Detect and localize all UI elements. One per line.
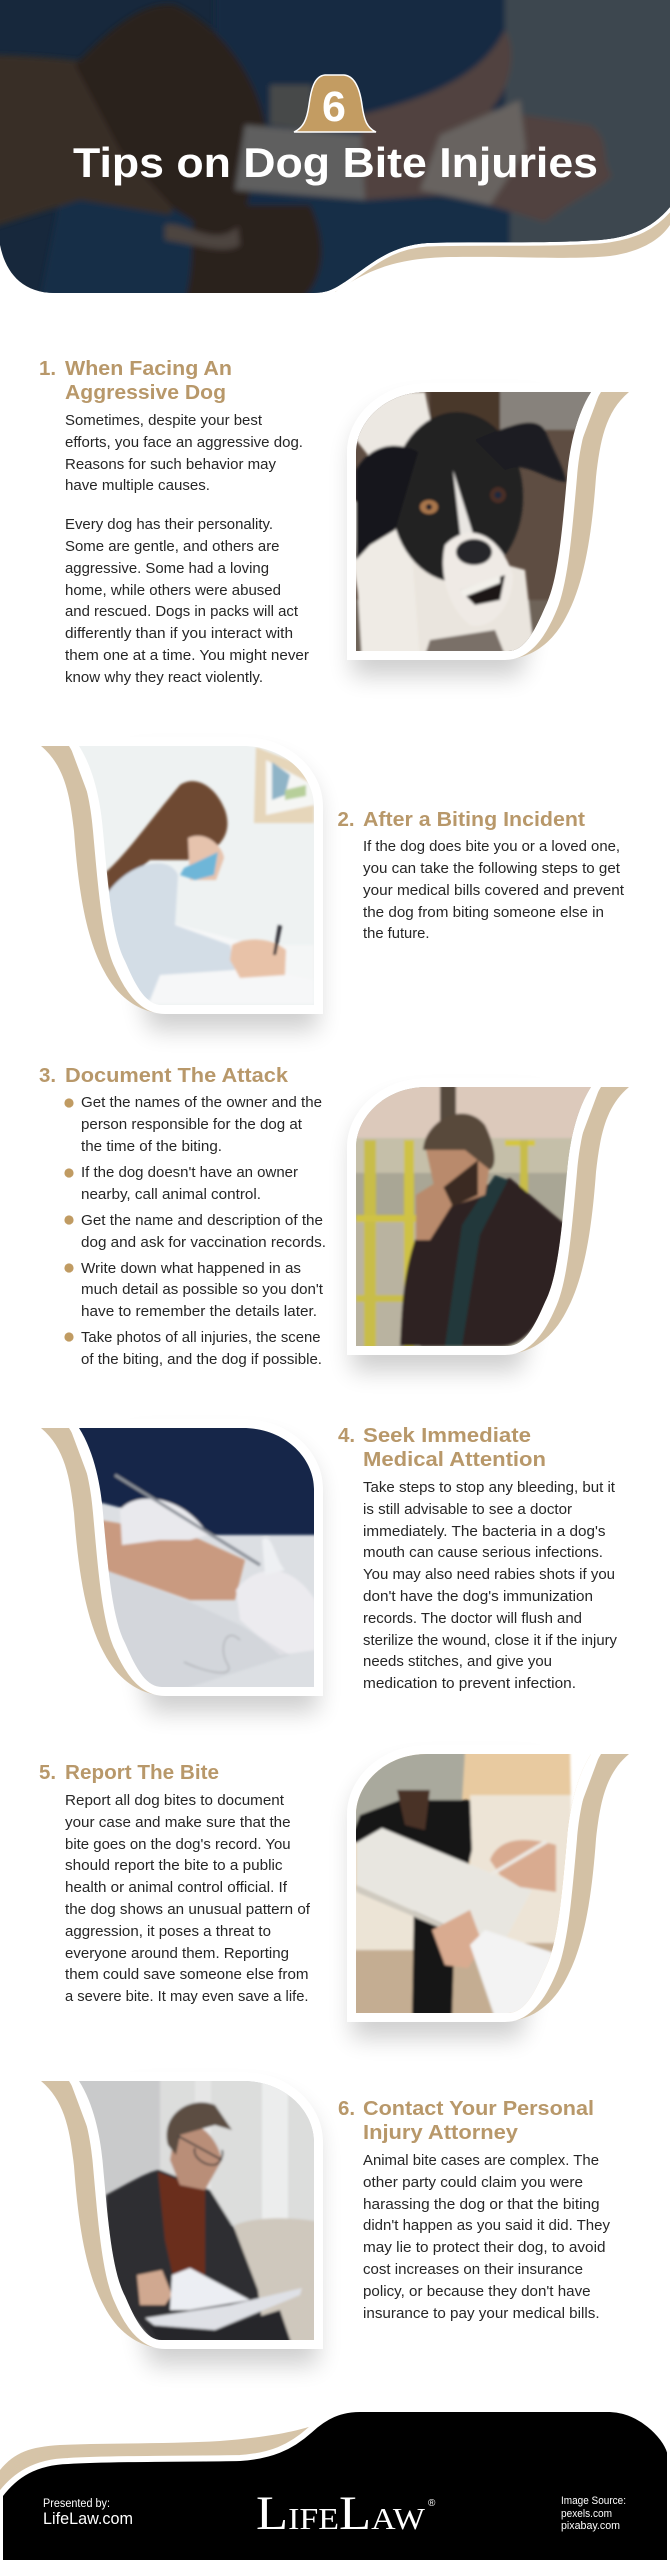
text block: tip 2 body: the dog from biting someone else in bbox=[363, 905, 604, 921]
text block: tip 6 body: insurance to pay your medical bills. bbox=[363, 2306, 600, 2322]
heading: tip 4: Seek Immediate bbox=[363, 1424, 531, 1447]
photo: snarling dog bbox=[356, 392, 591, 651]
text block: tip 2 body: you can take the following steps to get bbox=[363, 861, 620, 877]
text block: tip 4 body: records. The doctor will flush and bbox=[363, 1611, 582, 1627]
text block: tip 1 body: have multiple causes. bbox=[65, 478, 210, 494]
bullet list: tip 3: Get the names of the owner and the bbox=[81, 1095, 322, 1111]
header banner bbox=[0, 0, 670, 310]
header photo: bandaged hand bbox=[0, 0, 670, 310]
heading: tip 4: 4. bbox=[338, 1424, 355, 1447]
text block: tip 6 body: harassing the dog or that the biting bbox=[363, 2197, 600, 2213]
text block: tip 1 body: differently than if you interact with bbox=[65, 626, 293, 642]
text block: tip 4 body: medication to prevent infection. bbox=[363, 1676, 576, 1692]
heading: tip 1: Aggressive Dog bbox=[65, 381, 226, 404]
black footer shape bbox=[0, 2409, 670, 2560]
photo: attorney with papers bbox=[70, 2075, 320, 2345]
presented by: Presented by: bbox=[43, 2498, 110, 2510]
heading: tip 6: Contact Your Personal bbox=[363, 2097, 594, 2120]
heading: tip 1: When Facing An bbox=[65, 357, 232, 380]
bullet list: tip 3: dog and ask for vaccination records. bbox=[81, 1235, 326, 1251]
text block: tip 2 body: the future. bbox=[363, 926, 430, 942]
image frame: man on phone bbox=[347, 1078, 629, 1371]
panel: tip 5 bbox=[39, 1745, 629, 2038]
text block: tip 4 body: needs stitches, and give you bbox=[363, 1654, 552, 1670]
text block: tip 4 body: sterilize the wound, close it if the injury bbox=[363, 1633, 618, 1649]
panel: tip 6 bbox=[41, 2072, 611, 2365]
image source: Image Source: bbox=[561, 2495, 626, 2507]
bullet list: tip 3: nearby, call animal control. bbox=[81, 1187, 261, 1203]
text block: tip 6 body: didn't happen as you said it did. They bbox=[363, 2218, 611, 2234]
title: Tips on Dog Bite Injuries bbox=[73, 139, 598, 186]
text block: tip 4 body bbox=[363, 1480, 618, 1692]
text block: tip 6 body bbox=[363, 2153, 611, 2322]
heading: tip 4 bbox=[338, 1424, 546, 1471]
presented by bbox=[43, 2498, 133, 2528]
photo: masked doctor bbox=[70, 740, 320, 1010]
heading: tip 3: 3. bbox=[39, 1064, 56, 1087]
image source bbox=[561, 2495, 626, 2532]
bullet list: tip 3: the time of the biting. bbox=[81, 1139, 222, 1155]
text block: tip 4 body: mouth can cause serious infections. bbox=[363, 1545, 603, 1561]
badge: number 6: 6 bbox=[322, 83, 346, 131]
text block: tip 5 body bbox=[65, 1793, 311, 2005]
heading: tip 1 bbox=[39, 357, 232, 404]
text block: tip 1 body: aggressive. Some had a loving bbox=[65, 561, 269, 577]
white edge of header bbox=[0, 0, 670, 293]
text block: tip 6 body: policy, or because they don't have bbox=[363, 2284, 591, 2300]
logo: LifeLaw: LIFELAW bbox=[256, 2487, 426, 2540]
heading: tip 1: 1. bbox=[39, 357, 56, 380]
text block: tip 1 body: Sometimes, despite your best bbox=[65, 413, 262, 429]
panel: tip 3 bbox=[39, 1064, 629, 1371]
text block: tip 1 body: know why they react violently. bbox=[65, 670, 263, 686]
heading: tip 3: Document The Attack bbox=[65, 1064, 289, 1087]
heading: tip 4: Medical Attention bbox=[363, 1448, 546, 1471]
text block: tip 1 body: home, while others were abused bbox=[65, 583, 281, 599]
heading: tip 2: After a Biting Incident bbox=[363, 808, 585, 831]
text block: tip 4 body: Take steps to stop any bleeding, but it bbox=[363, 1480, 615, 1496]
bullet list: tip 3: Write down what happened in as bbox=[81, 1261, 301, 1277]
footer bbox=[0, 2409, 670, 2560]
bullet list: tip 3: Get the name and description of the bbox=[81, 1213, 323, 1229]
presented by: LifeLaw.com bbox=[43, 2510, 133, 2528]
heading: tip 6: 6. bbox=[338, 2097, 355, 2120]
text block: tip 5 body: should report the bite to a public bbox=[65, 1858, 282, 1874]
tan wave above footer bbox=[0, 2422, 340, 2515]
text block: tip 1 body: Every dog has their personality. bbox=[65, 517, 273, 533]
heading: tip 5: Report The Bite bbox=[65, 1761, 219, 1784]
text block: tip 5 body: a severe bite. It may even save a life. bbox=[65, 1989, 308, 2005]
bullet list: tip 3: person responsible for the dog at bbox=[81, 1117, 302, 1133]
text block: tip 1 body: Some are gentle, and others are bbox=[65, 539, 280, 555]
text block: tip 5 body: them could save someone else from bbox=[65, 1967, 308, 1983]
text block: tip 5 body: your case and make sure that the bbox=[65, 1815, 291, 1831]
text block: tip 2 body: your medical bills covered and prevent bbox=[363, 883, 624, 899]
photo: stitching a wound bbox=[79, 1428, 314, 1687]
text block: tip 5 body: aggression, it poses a threat to bbox=[65, 1924, 271, 1940]
image frame: dog bbox=[347, 383, 629, 676]
text block: tip 4 body: immediately. The bacteria in a dog's bbox=[363, 1524, 606, 1540]
image frame: reading a report bbox=[347, 1745, 629, 2038]
bullet list: tip 3: much detail as possible so you don't bbox=[81, 1282, 323, 1298]
heading: tip 2: 2. bbox=[338, 808, 355, 831]
text block: tip 2 body: If the dog does bite you or a loved one, bbox=[363, 839, 620, 855]
heading: tip 6: Injury Attorney bbox=[363, 2121, 519, 2144]
badge: number 6 bbox=[294, 75, 376, 132]
bullet list: tip 3: Take photos of all injuries, the scene bbox=[81, 1330, 320, 1346]
text block: tip 5 body: health or animal control official. If bbox=[65, 1880, 288, 1896]
heading: tip 5: 5. bbox=[39, 1761, 56, 1784]
text block: tip 1 body: them one at a time. You might never bbox=[65, 648, 309, 664]
text block: tip 4 body: You may also need rabies shots if you bbox=[363, 1567, 615, 1583]
text block: tip 6 body: cost increases on their insurance bbox=[363, 2262, 583, 2278]
image frame: doctor stitching hand bbox=[41, 1419, 323, 1712]
text block: tip 6 body: may lie to protect their dog, to avoid bbox=[363, 2240, 606, 2256]
photo: man on phone bbox=[350, 1080, 600, 1350]
image source: pexels.com bbox=[561, 2508, 612, 2520]
text block: tip 1 body bbox=[65, 413, 309, 686]
panel: tip 4 bbox=[41, 1419, 618, 1712]
bullet list: tip 3: If the dog doesn't have an owner bbox=[81, 1165, 298, 1181]
bullet list: tip 3: have to remember the details later. bbox=[81, 1304, 317, 1320]
photo: clipboard report bbox=[350, 1748, 600, 2018]
heading: tip 6 bbox=[338, 2097, 594, 2144]
text block: tip 4 body: don't have the dog's immunization bbox=[363, 1589, 593, 1605]
text block: tip 5 body: everyone around them. Reporting bbox=[65, 1946, 289, 1962]
text block: tip 1 body: Reasons for such behavior may bbox=[65, 457, 277, 473]
bullet list: tip 3 bbox=[64, 1095, 326, 1368]
image source: pixabay.com bbox=[561, 2520, 620, 2532]
text block: tip 5 body: Report all dog bites to document bbox=[65, 1793, 284, 1809]
text block: tip 6 body: other party could claim you were bbox=[363, 2175, 583, 2191]
bullet list: tip 3: of the biting, and the dog if possible. bbox=[81, 1352, 322, 1368]
panel: tip 1 bbox=[39, 357, 629, 686]
text block: tip 2 body bbox=[363, 839, 624, 942]
panel: tip 2 bbox=[41, 737, 624, 1030]
text block: tip 5 body: the dog shows an unusual pattern of bbox=[65, 1902, 311, 1918]
text block: tip 5 body: bite goes on the dog's record. You bbox=[65, 1837, 291, 1853]
text block: tip 1 body: efforts, you face an aggressive dog. bbox=[65, 435, 303, 451]
tan wave under header bbox=[335, 195, 670, 292]
image frame: doctor writing bbox=[41, 737, 323, 1030]
text block: tip 4 body: is still advisable to see a doctor bbox=[363, 1502, 572, 1518]
text block: tip 1 body: and rescued. Dogs in packs will act bbox=[65, 604, 298, 620]
text block: tip 6 body: Animal bite cases are complex. The bbox=[363, 2153, 599, 2169]
logo: LifeLaw: ® bbox=[428, 2498, 436, 2509]
image frame: attorney reading bbox=[41, 2072, 323, 2365]
